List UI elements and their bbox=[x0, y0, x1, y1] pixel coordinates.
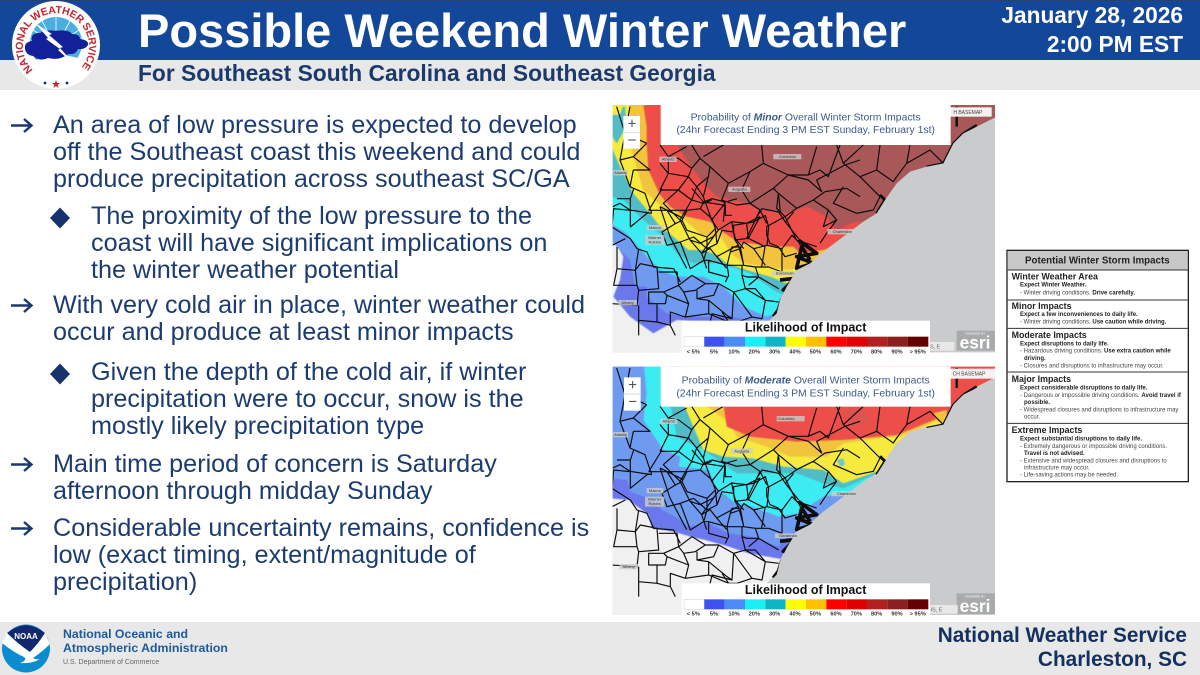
sub-bullet text: Given the depth of the cold air, if winter bbox=[91, 358, 526, 386]
section: moderate impacts bbox=[1012, 330, 1171, 369]
legend: likelihood of impact: Likelihood of Impact bbox=[745, 583, 867, 597]
attribution bbox=[928, 342, 954, 351]
section: major impacts: occur. bbox=[1024, 415, 1040, 421]
department line: U.S. Department of Commerce bbox=[63, 659, 159, 666]
section: extreme impacts: Expect substantial disruptions to daily life. bbox=[1020, 436, 1142, 442]
city labels: Augusta bbox=[732, 187, 747, 192]
esri logo: esri bbox=[960, 333, 990, 353]
county boundaries bbox=[612, 368, 977, 597]
map title box bbox=[661, 105, 951, 145]
legend: likelihood of impact: < 5% bbox=[687, 611, 700, 617]
city labels: Charleston bbox=[837, 491, 856, 496]
panel heading bbox=[1008, 251, 1188, 270]
legend: likelihood of impact: 10% bbox=[728, 349, 740, 355]
attribution: S, E bbox=[930, 344, 941, 350]
NOAA name bbox=[63, 627, 228, 655]
city labels: Albany bbox=[622, 300, 634, 305]
section: major impacts: - Widespread closures and disruptions to infrastructure may bbox=[1020, 407, 1178, 413]
section: winter weather area: - Winter driving conditions. Drive carefully. bbox=[1020, 290, 1135, 296]
bullet text bbox=[53, 111, 580, 193]
city labels: Charleston bbox=[833, 229, 852, 234]
icon: NOAA logo: NOAA bbox=[14, 632, 38, 641]
section: moderate impacts: - Hazardous driving conditions. Use extra caution while bbox=[1020, 349, 1171, 355]
legend: likelihood of impact: 5% bbox=[710, 349, 718, 355]
section: extreme impacts bbox=[1012, 425, 1167, 479]
section: extreme impacts: Extreme Impacts bbox=[1012, 425, 1082, 435]
header blue bar bbox=[0, 0, 1200, 60]
city labels: Robins bbox=[648, 501, 661, 506]
city labels: Warner bbox=[648, 235, 662, 240]
city labels: Athens bbox=[662, 419, 675, 424]
legend: likelihood of impact: 60% bbox=[830, 611, 842, 617]
city labels: Savannah bbox=[779, 533, 797, 538]
legend: likelihood of impact: 10% bbox=[728, 611, 740, 617]
section: moderate impacts: Moderate Impacts bbox=[1012, 330, 1087, 340]
section: winter weather area bbox=[1012, 272, 1135, 296]
bullet text bbox=[53, 450, 497, 505]
section: minor impacts: - Winter driving conditions. Use caution while driving. bbox=[1020, 320, 1167, 326]
probability shading bbox=[610, 100, 1000, 360]
icon: diamond bullet bbox=[50, 208, 70, 228]
bullet text: produce precipitation across southeast SC/GA bbox=[53, 165, 570, 193]
legend: likelihood of impact bbox=[682, 583, 930, 618]
city labels: Atlanta bbox=[614, 170, 627, 175]
office name: Charleston, SC bbox=[1038, 648, 1187, 671]
attribution: IS, E bbox=[931, 607, 943, 613]
icon: arrow bullet bbox=[11, 118, 34, 133]
esri logo: POWERED BY bbox=[965, 594, 985, 598]
section: extreme impacts: - Life-saving actions may be needed. bbox=[1020, 473, 1118, 479]
legend: likelihood of impact: 5% bbox=[710, 611, 718, 617]
esri logo: POWERED BY bbox=[965, 332, 985, 336]
city labels: Warner bbox=[648, 497, 662, 502]
panel heading: Potential Winter Storm Impacts bbox=[1025, 256, 1170, 267]
sub-bullet text: The proximity of the low pressure to the bbox=[91, 202, 532, 230]
legend: likelihood of impact: < 5% bbox=[687, 349, 700, 355]
map title box: Probability of Minor Overall Winter Storm Impacts bbox=[691, 113, 921, 124]
bullet text: occur and produce at least minor impacts bbox=[53, 318, 514, 346]
section: winter weather area: Expect Winter Weather. bbox=[1020, 283, 1087, 289]
map title box: (24hr Forecast Ending 3 PM EST Sunday, February 1st) bbox=[676, 388, 935, 399]
zoom control bbox=[624, 377, 641, 411]
city labels: Augusta bbox=[734, 448, 750, 453]
section: winter weather area: Winter Weather Area bbox=[1012, 272, 1098, 282]
city labels bbox=[613, 416, 862, 569]
legend: likelihood of impact: 30% bbox=[769, 611, 780, 617]
text block: bullet 2 bbox=[11, 291, 585, 346]
sub-bullet text: mostly likely precipitation type bbox=[91, 412, 424, 440]
legend: likelihood of impact: 90% bbox=[891, 611, 903, 617]
section: minor impacts bbox=[1012, 301, 1167, 326]
legend: likelihood of impact: 60% bbox=[830, 349, 842, 355]
bullet text: Considerable uncertainty remains, confidence is bbox=[53, 514, 589, 542]
map: probability of minor impacts bbox=[612, 105, 995, 355]
section: moderate impacts: driving. bbox=[1024, 356, 1046, 362]
map title box: (24hr Forecast Ending 3 PM EST Sunday, February 1st) bbox=[676, 125, 935, 136]
panel: potential winter storm impacts bbox=[1006, 250, 1189, 482]
icon: NOAA logo bbox=[2, 624, 50, 672]
section: extreme impacts: Travel is not advised. bbox=[1024, 451, 1085, 457]
map title box bbox=[661, 367, 951, 407]
legend: likelihood of impact: 80% bbox=[871, 349, 882, 355]
text block: sub-bullet 1 bbox=[50, 202, 547, 284]
ocean bbox=[610, 360, 1000, 620]
section: moderate impacts: Expect disruptions to daily life. bbox=[1020, 341, 1109, 347]
bullet text: afternoon through midday Sunday bbox=[53, 477, 432, 505]
section: major impacts bbox=[1012, 374, 1182, 421]
legend: likelihood of impact: > 95% bbox=[910, 349, 926, 355]
NOAA name: National Oceanic and bbox=[63, 627, 188, 641]
esri logo: esri bbox=[960, 596, 990, 616]
city labels: Savannah bbox=[776, 271, 794, 276]
bullet text: low (exact timing, extent/magnitude of bbox=[53, 541, 476, 569]
city labels: Robins bbox=[648, 239, 661, 244]
city labels: Columbia bbox=[779, 154, 797, 159]
bullet text: An area of low pressure is expected to develop bbox=[53, 111, 577, 139]
footer band bbox=[0, 622, 1200, 675]
bullet text: precipitation) bbox=[53, 568, 197, 596]
section: extreme impacts: - Extensive and widespread closures and disruptions to bbox=[1020, 458, 1167, 464]
county boundaries bbox=[612, 107, 977, 335]
text block: bullet 3 bbox=[11, 450, 497, 505]
basemap label bbox=[950, 107, 992, 117]
city labels: Columbia bbox=[778, 416, 795, 421]
map title box: Probability of Moderate Overall Winter Storm Impacts bbox=[682, 375, 930, 386]
legend: likelihood of impact: 70% bbox=[851, 349, 862, 355]
legend: likelihood of impact: 40% bbox=[789, 349, 801, 355]
section: minor impacts: Expect a few inconveniences to daily life. bbox=[1020, 312, 1138, 318]
city labels: Atlanta bbox=[614, 432, 627, 437]
NOAA name: Atmospheric Administration bbox=[63, 641, 228, 655]
legend: likelihood of impact: 80% bbox=[871, 611, 882, 617]
bullet text: off the Southeast coast this weekend and could bbox=[53, 138, 580, 166]
bullet text: With very cold air in place, winter weather could bbox=[53, 291, 585, 319]
bullet text: Main time period of concern is Saturday bbox=[53, 450, 497, 478]
date and time: January 28, 2026 bbox=[1001, 2, 1183, 28]
ocean bbox=[610, 100, 1000, 360]
probability shading bbox=[610, 360, 1000, 620]
attribution bbox=[928, 605, 958, 614]
legend: likelihood of impact: 50% bbox=[810, 611, 821, 617]
section: major impacts: - Dangerous or impossible driving conditions. Avoid travel if bbox=[1020, 393, 1182, 399]
sub-bullet text: coast will have significant implications on bbox=[91, 229, 547, 257]
header band bbox=[0, 0, 1200, 90]
sub-bullet text: precipitation were to occur, snow is the bbox=[91, 385, 524, 413]
bullet text bbox=[53, 291, 585, 346]
title: Possible Weekend Winter Weather bbox=[138, 4, 906, 57]
text block: bullet 4 bbox=[11, 514, 589, 596]
city labels: Macon bbox=[649, 488, 661, 493]
legend: likelihood of impact: 30% bbox=[769, 349, 780, 355]
sub-bullet text bbox=[91, 202, 547, 284]
legend: likelihood of impact: 90% bbox=[891, 349, 903, 355]
legend: likelihood of impact: 70% bbox=[851, 611, 862, 617]
city labels: Athens bbox=[662, 157, 674, 162]
city labels bbox=[613, 154, 857, 305]
text block: bullet 1 bbox=[11, 111, 580, 193]
icon: National Weather Service logo: NATIONAL WEATHER SERVICE bbox=[16, 6, 96, 74]
section: minor impacts: Minor Impacts bbox=[1012, 301, 1072, 311]
sub-bullet text bbox=[91, 358, 526, 440]
city labels: Albany bbox=[623, 564, 635, 569]
legend: likelihood of impact: 20% bbox=[749, 349, 760, 355]
section: major impacts: Major Impacts bbox=[1012, 374, 1071, 384]
icon: diamond bullet bbox=[50, 364, 70, 384]
basemap label: CH BASEMAP bbox=[953, 371, 986, 377]
icon: arrow bullet bbox=[11, 521, 34, 536]
date and time bbox=[1001, 2, 1183, 57]
basemap label: H BASEMAP bbox=[953, 110, 983, 116]
text block: sub-bullet 2 bbox=[50, 358, 526, 440]
section: extreme impacts: - Extremely dangerous or impossible driving conditions. bbox=[1020, 444, 1167, 450]
legend: likelihood of impact: > 95% bbox=[910, 611, 926, 617]
section: major impacts: Expect considerable disruptions to daily life. bbox=[1020, 385, 1148, 391]
legend: likelihood of impact bbox=[682, 321, 930, 356]
city labels: Macon bbox=[649, 225, 661, 230]
legend: likelihood of impact: 20% bbox=[749, 611, 760, 617]
icon: arrow bullet bbox=[11, 298, 34, 313]
icon: arrow bullet bbox=[11, 457, 34, 472]
map: probability of moderate impacts bbox=[612, 366, 995, 617]
bullet text bbox=[53, 514, 589, 596]
office name bbox=[938, 624, 1187, 671]
subtitle: For Southeast South Carolina and Southeast Georgia bbox=[138, 60, 716, 86]
zoom control bbox=[623, 116, 640, 149]
office name: National Weather Service bbox=[938, 624, 1187, 647]
sub-bullet text: the winter weather potential bbox=[91, 256, 399, 284]
legend: likelihood of impact: 50% bbox=[810, 349, 821, 355]
section: moderate impacts: - Closures and disruptions to infrastructure may occur. bbox=[1020, 363, 1164, 369]
legend: likelihood of impact: Likelihood of Impact bbox=[745, 321, 867, 335]
section: major impacts: possible. bbox=[1024, 400, 1050, 406]
legend: likelihood of impact: 40% bbox=[789, 611, 801, 617]
date and time: 2:00 PM EST bbox=[1047, 31, 1183, 57]
basemap label bbox=[950, 369, 998, 379]
section: extreme impacts: infrastructure may occur. bbox=[1024, 465, 1090, 471]
